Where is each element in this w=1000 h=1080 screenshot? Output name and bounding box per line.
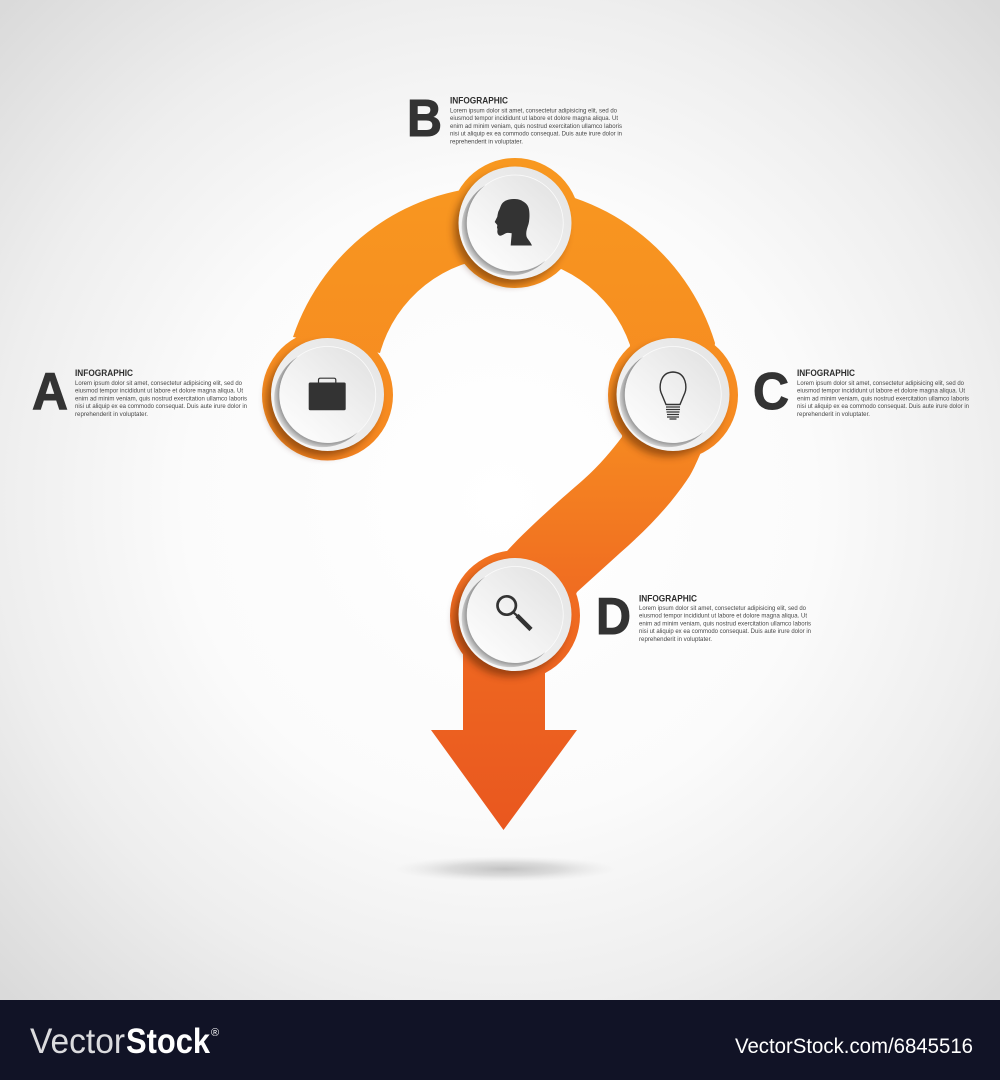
text D: eiusmod tempor incididunt ut labore et dolore magna aliqua. Ut	[639, 613, 807, 620]
block C	[753, 363, 970, 421]
icon: head	[495, 199, 532, 246]
icon: briefcase	[309, 378, 346, 410]
letter B: B	[407, 90, 442, 148]
text C: reprehenderit in voluptater.	[797, 411, 870, 418]
text D: reprehenderit in voluptater.	[639, 636, 712, 643]
disc D: magnifier	[454, 558, 572, 676]
text D: INFOGRAPHIC	[639, 594, 698, 604]
text B: INFOGRAPHIC	[450, 96, 509, 106]
footer logo	[30, 1022, 219, 1061]
letter D: D	[596, 588, 631, 646]
arrow ground shadow	[393, 856, 617, 882]
text C: enim ad minim veniam, quis nostrud exercitation ullamco laboris	[797, 395, 970, 402]
disc A: briefcase	[266, 338, 384, 456]
text B	[450, 96, 623, 145]
text A: reprehenderit in voluptater.	[75, 411, 148, 418]
text B: nisi ut aliquip ex ea commodo consequat. Duis aute irure dolor in	[450, 131, 622, 138]
text A: enim ad minim veniam, quis nostrud exercitation ullamco laboris	[75, 395, 248, 402]
text C: nisi ut aliquip ex ea commodo consequat. Duis aute irure dolor in	[797, 403, 969, 410]
footer url: VectorStock.com/6845516	[735, 1035, 973, 1058]
text C: eiusmod tempor incididunt ut labore et dolore magna aliqua. Ut	[797, 388, 965, 395]
icon: magnifier	[498, 596, 531, 630]
question mark arrow	[262, 158, 738, 830]
text D	[639, 594, 812, 643]
text A: INFOGRAPHIC	[75, 368, 134, 378]
letter A: A	[32, 363, 68, 421]
text B: eiusmod tempor incididunt ut labore et dolore magna aliqua. Ut	[450, 115, 618, 122]
disc B: head	[454, 166, 572, 285]
text C: Lorem ipsum dolor sit amet, consectetur adipisicing elit, sed do	[797, 380, 964, 387]
disc C: light bulb	[612, 338, 730, 456]
text B: Lorem ipsum dolor sit amet, consectetur adipisicing elit, sed do	[450, 108, 617, 114]
footer logo: ®	[211, 1027, 219, 1039]
text D: Lorem ipsum dolor sit amet, consectetur adipisicing elit, sed do	[639, 605, 806, 612]
text C	[797, 368, 970, 418]
text D: nisi ut aliquip ex ea commodo consequat. Duis aute irure dolor in	[639, 628, 811, 635]
text B: reprehenderit in voluptater.	[450, 138, 523, 145]
text A	[75, 368, 248, 418]
block D	[596, 588, 812, 646]
footer logo: Vector	[30, 1022, 125, 1061]
footer logo: Stock	[126, 1022, 210, 1061]
text C: INFOGRAPHIC	[797, 368, 856, 378]
text A: nisi ut aliquip ex ea commodo consequat. Duis aute irure dolor in	[75, 403, 247, 410]
text A: eiusmod tempor incididunt ut labore et dolore magna aliqua. Ut	[75, 388, 243, 395]
footer bar	[0, 1000, 1000, 1080]
block A	[32, 363, 248, 421]
icon: light bulb	[660, 372, 686, 419]
text A: Lorem ipsum dolor sit amet, consectetur adipisicing elit, sed do	[75, 380, 242, 387]
letter C: C	[753, 363, 789, 421]
text D: enim ad minim veniam, quis nostrud exercitation ullamco laboris	[639, 620, 812, 627]
text B: enim ad minim veniam, quis nostrud exercitation ullamco laboris	[450, 123, 623, 130]
block B	[407, 90, 623, 148]
